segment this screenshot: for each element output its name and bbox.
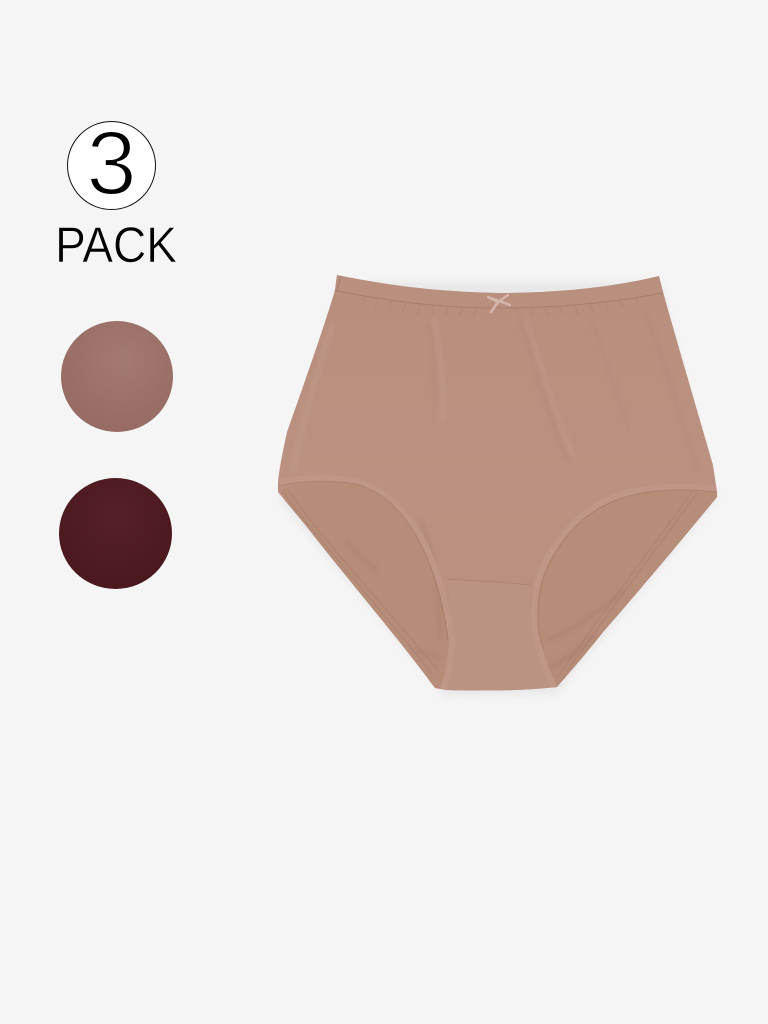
product illustration: briefs: [278, 275, 717, 694]
waistband seam and gathers: [333, 276, 663, 317]
body folds: [293, 310, 697, 470]
leg bands: [280, 478, 717, 690]
lower hem stitching: [283, 490, 698, 678]
waistband: [334, 275, 662, 293]
fabric fold shadows: [345, 520, 625, 670]
right leg opening: [554, 497, 717, 688]
left leg opening: [286, 501, 442, 690]
soft shadow: [280, 282, 716, 696]
bow: [488, 295, 510, 312]
badge: 3 in circle: [67, 121, 156, 210]
colour swatch: taupe: [61, 321, 173, 432]
colour swatch: maroon: [59, 478, 172, 589]
garment body: [278, 275, 717, 691]
heading: PACK: PACK: [55, 217, 177, 273]
gusset seam: [447, 579, 530, 585]
badge: 3 in circle: 3: [86, 114, 137, 214]
gusset: [442, 651, 554, 690]
